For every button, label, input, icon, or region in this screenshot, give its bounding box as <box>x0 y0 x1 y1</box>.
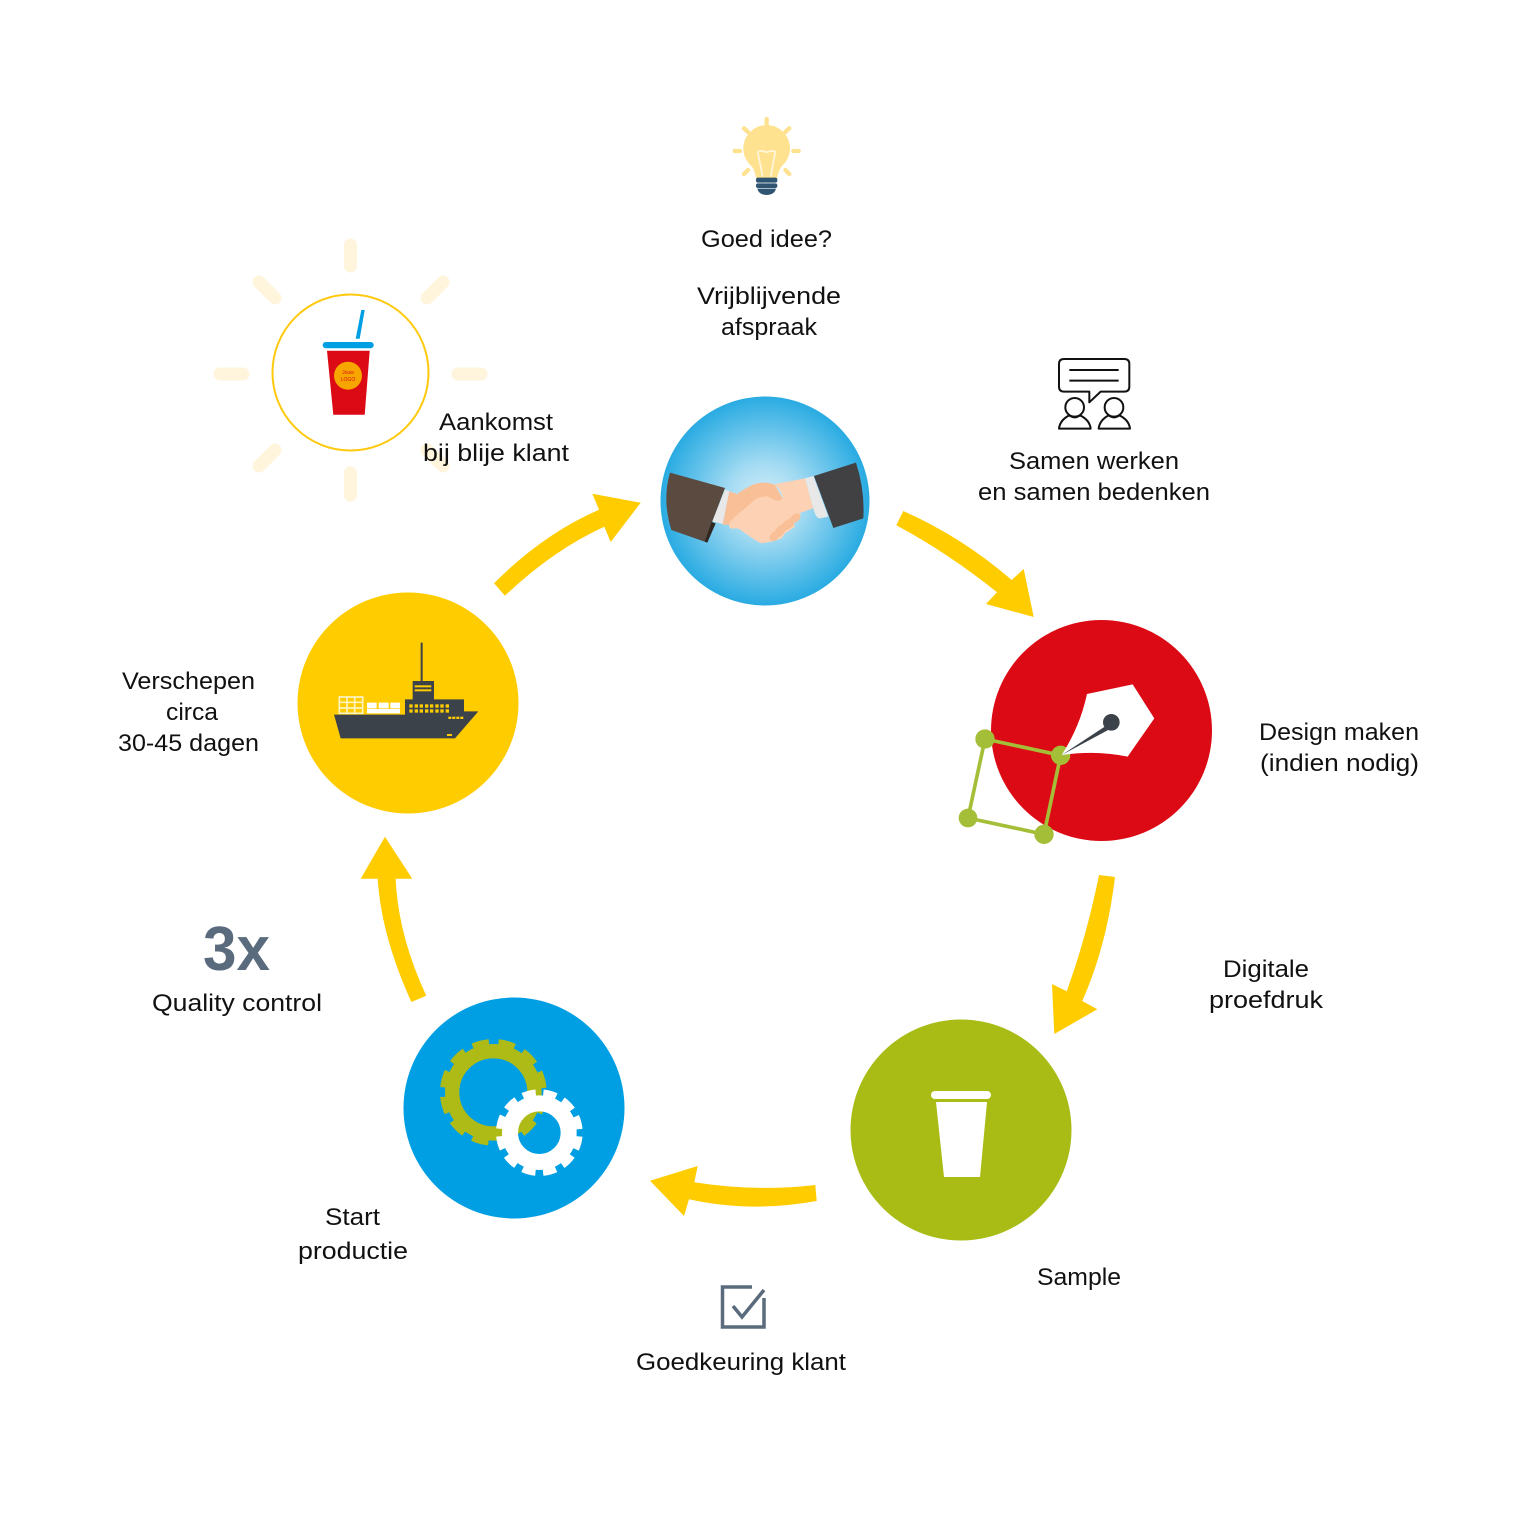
text: vrijblijvende afspraak <box>697 283 841 341</box>
text: goedkeuring klant: Goedkeuring klant <box>636 1349 846 1376</box>
arrow: handshake to design <box>896 511 1034 617</box>
icon: gears <box>439 1038 583 1176</box>
text: design maken <box>1259 719 1419 777</box>
icon: container ship <box>334 643 478 738</box>
text: aankomst: Aankomst <box>439 409 553 436</box>
arrow: shipping to customer <box>494 494 641 596</box>
icon: sun rays with drink cup: Jouw <box>342 370 354 376</box>
panel: blue production circle <box>404 998 624 1218</box>
text: digitale proefdruk: Digitale <box>1223 956 1309 983</box>
icon: pen tool <box>959 684 1154 844</box>
text: digitale proefdruk <box>1209 956 1324 1014</box>
text: verschepen: Verschepen <box>122 668 255 695</box>
text: vrijblijvende afspraak: afspraak <box>721 314 818 341</box>
callout: 3x quality control <box>152 915 322 1017</box>
heading: Goed idee: Goed idee? <box>701 226 832 253</box>
callout: 3x quality control: Quality control <box>152 990 322 1017</box>
arrow: production to shipping <box>361 837 426 1002</box>
text: samen werken <box>978 448 1210 506</box>
text: samen werken: Samen werken <box>1009 448 1179 475</box>
text: design maken: (indien nodig) <box>1260 750 1419 777</box>
icon: two people talking <box>1059 359 1130 429</box>
icon: checkbox <box>722 1287 764 1327</box>
text: start productie <box>298 1204 408 1265</box>
icon: white cup <box>931 1091 991 1177</box>
text: design maken: Design maken <box>1259 719 1419 746</box>
text: digitale proefdruk: proefdruk <box>1209 987 1324 1014</box>
text: verschepen: 30-45 dagen <box>118 730 259 757</box>
icon: lightbulb <box>735 119 799 195</box>
text: vrijblijvende afspraak: Vrijblijvende <box>697 283 841 310</box>
text: samen werken: en samen bedenken <box>978 479 1210 506</box>
panel: yellow shipping circle <box>298 592 518 814</box>
text: aankomst <box>423 409 569 467</box>
panel: handshake circle <box>660 396 870 606</box>
text: aankomst: bij blije klant <box>423 440 569 467</box>
panel: red design circle <box>991 620 1212 841</box>
arrow: design to sample <box>1052 875 1115 1034</box>
callout: 3x quality control: 3x <box>203 915 270 984</box>
icon: sun rays with drink cup: LOGO <box>341 377 355 383</box>
arrow: sample to production <box>650 1166 817 1216</box>
text: start productie: productie <box>298 1238 408 1265</box>
text: start productie: Start <box>325 1204 380 1231</box>
text: verschepen <box>118 668 259 757</box>
icon: sun rays with drink cup <box>220 245 481 495</box>
text: verschepen: circa <box>166 699 219 726</box>
panel: green sample circle <box>850 1020 1072 1240</box>
text: sample: Sample <box>1037 1264 1121 1291</box>
